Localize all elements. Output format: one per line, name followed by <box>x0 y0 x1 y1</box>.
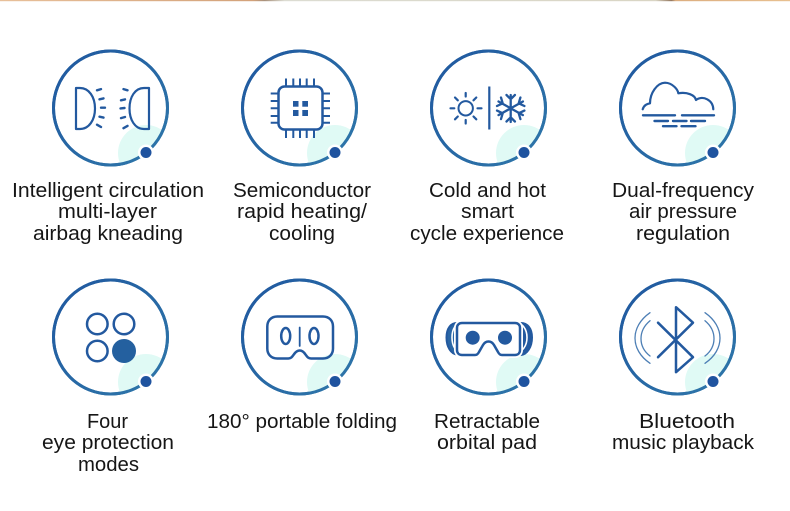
badge ring <box>430 278 547 396</box>
label: music playback <box>612 432 755 454</box>
label <box>612 411 755 454</box>
icon: cloud and mist <box>643 83 714 126</box>
feature: retractable orbital pad <box>432 280 552 454</box>
icon: folded headset <box>267 316 333 358</box>
label: Cold and hot <box>429 180 546 202</box>
label: air pressure <box>629 201 737 223</box>
badge ring <box>241 278 358 396</box>
label: 180° portable folding <box>207 411 397 433</box>
feature: bluetooth music <box>612 280 755 454</box>
label: Bluetooth <box>639 411 735 433</box>
top edge strip <box>0 0 790 1</box>
label: airbag kneading <box>33 223 183 245</box>
feature: intelligent circulation airbag <box>12 51 204 245</box>
feature: cold and hot cycle <box>410 51 564 245</box>
badge ring <box>52 50 169 166</box>
label: smart <box>461 201 514 223</box>
label: orbital pad <box>437 432 537 454</box>
label: rapid heating/ <box>237 201 367 223</box>
badge ring <box>52 278 169 396</box>
feature: portable folding <box>207 280 397 433</box>
badge ring <box>430 50 547 166</box>
label <box>434 411 540 454</box>
label <box>233 180 371 245</box>
icon: four mode circles <box>87 314 136 363</box>
label: regulation <box>636 223 730 245</box>
label: Retractable <box>434 411 540 433</box>
label <box>410 180 564 245</box>
icon: goggles with pads <box>446 322 532 355</box>
label: Four <box>87 411 128 433</box>
badge ring <box>619 278 736 396</box>
label <box>12 180 204 245</box>
label <box>612 180 754 245</box>
label <box>42 411 174 476</box>
label: Semiconductor <box>233 180 371 202</box>
badge ring <box>241 50 358 166</box>
icon: chip <box>271 78 330 138</box>
label: modes <box>78 454 139 476</box>
feature: dual-frequency air pressure <box>612 51 754 245</box>
badge ring <box>619 50 736 166</box>
label: cycle experience <box>410 223 564 245</box>
feature: semiconductor heating and cooling <box>233 51 371 245</box>
feature: four eye protection modes <box>42 280 174 476</box>
icon: sun and snowflake <box>450 86 524 130</box>
icon: opposing lamps <box>76 88 149 129</box>
icon: bluetooth with sound waves <box>635 307 720 372</box>
label: multi-layer <box>58 201 157 223</box>
label: Intelligent circulation <box>12 180 204 202</box>
label: cooling <box>269 223 335 245</box>
label: eye protection <box>42 432 174 454</box>
label: Dual-frequency <box>612 180 754 202</box>
